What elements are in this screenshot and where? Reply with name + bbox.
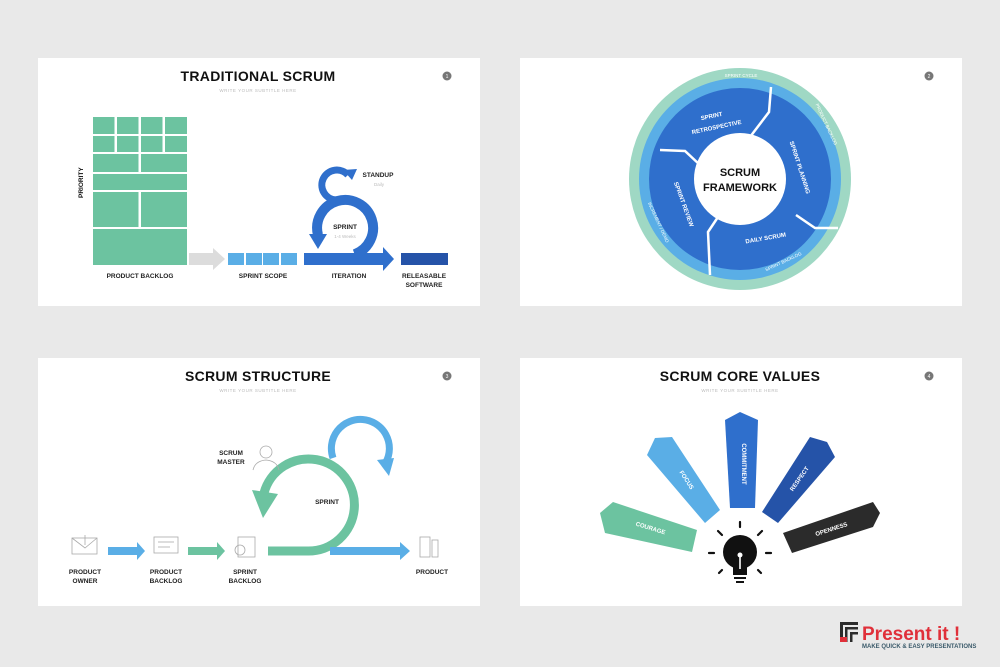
value bars: COURAGE [635, 522, 666, 536]
logo: Present it ! [862, 624, 960, 645]
labels: SPRINT [233, 569, 257, 576]
sprint label: SPRINT [333, 224, 357, 231]
logo [840, 622, 976, 650]
labels: PRODUCT [150, 569, 182, 576]
framework wheel: INCREMENT / DEMO [647, 201, 670, 244]
subtitle: WRITE YOUR SUBTITLE HERE [219, 88, 297, 93]
subtitle: WRITE YOUR SUBTITLE HERE [219, 388, 297, 393]
panel: traditional scrum [38, 58, 480, 306]
framework wheel: SPRINT REVIEW [672, 181, 694, 228]
sprint label: 1-4 Weeks [334, 234, 356, 239]
scrum master: SCRUM [219, 450, 243, 457]
value bars: COMMITMENT [740, 443, 746, 485]
bottom labels: ITERATION [332, 273, 367, 280]
bottom labels: SOFTWARE [406, 282, 443, 289]
iteration arrow with sprint loop [304, 169, 394, 271]
sprint scope squares [228, 253, 297, 265]
badge 1 [442, 72, 452, 80]
labels: PRODUCT [69, 569, 101, 576]
bottom labels [107, 273, 447, 289]
title: SCRUM CORE VALUES [660, 368, 820, 384]
framework wheel: DAILY SCRUM [745, 232, 787, 246]
framework wheel: SPRINT PLANNING [788, 141, 810, 195]
value bars: OPENNESS [815, 522, 848, 538]
value bars [600, 412, 880, 553]
labels: BACKLOG [150, 578, 182, 585]
badge 3 [442, 372, 452, 380]
value bars: FOCUS [678, 470, 694, 491]
scrum master [217, 446, 279, 470]
title: TRADITIONAL SCRUM [181, 68, 335, 84]
framework wheel: PRODUCT BACKLOG [815, 103, 838, 146]
labels: OWNER [73, 578, 98, 585]
panel: scrum core values [520, 358, 962, 606]
framework wheel: FRAMEWORK [703, 182, 777, 194]
panel: scrum structure [38, 358, 480, 606]
title: SCRUM STRUCTURE [185, 368, 331, 384]
logo: MAKE QUICK & EASY PRESENTATIONS [862, 644, 976, 650]
panel: scrum framework [520, 58, 962, 306]
framework wheel: RETROSPECTIVE [691, 120, 742, 136]
badge 2: 2 [928, 74, 931, 80]
bottom labels: RELEASABLE [402, 273, 447, 280]
badge 2 [924, 72, 934, 80]
badge 1: 1 [446, 74, 449, 80]
product backlog grid [93, 117, 187, 265]
arrows flow [108, 542, 145, 560]
scrum master: MASTER [217, 459, 245, 466]
sprint label: SPRINT [315, 499, 339, 506]
blue top loop arrow [331, 419, 394, 476]
framework wheel: SCRUM [720, 167, 760, 179]
value bars: RESPECT [790, 466, 811, 493]
bottom labels: PRODUCT BACKLOG [107, 273, 173, 280]
standup label: Daily [374, 182, 385, 187]
icon: light bulb [709, 522, 771, 583]
framework wheel [629, 68, 851, 290]
icons [72, 535, 438, 557]
badge 3: 3 [446, 374, 449, 380]
releasable software bar [401, 253, 448, 265]
green sprint loop [252, 459, 354, 551]
labels [69, 569, 448, 585]
labels: PRODUCT [416, 569, 448, 576]
framework wheel: SPRINT BACKLOG [764, 251, 803, 272]
standup label [363, 172, 394, 187]
standup label: STANDUP [363, 172, 394, 179]
badge 4: 4 [928, 374, 931, 380]
subtitle: WRITE YOUR SUBTITLE HERE [701, 388, 779, 393]
badge 4 [924, 372, 934, 380]
priority label: PRIORITY [78, 167, 85, 198]
framework wheel: SPRINT [700, 112, 723, 122]
bottom labels: SPRINT SCOPE [239, 273, 288, 280]
grey arrow [189, 248, 225, 270]
framework wheel: SPRINT CYCLE [725, 73, 757, 78]
labels: BACKLOG [229, 578, 261, 585]
sprint label [333, 224, 357, 239]
